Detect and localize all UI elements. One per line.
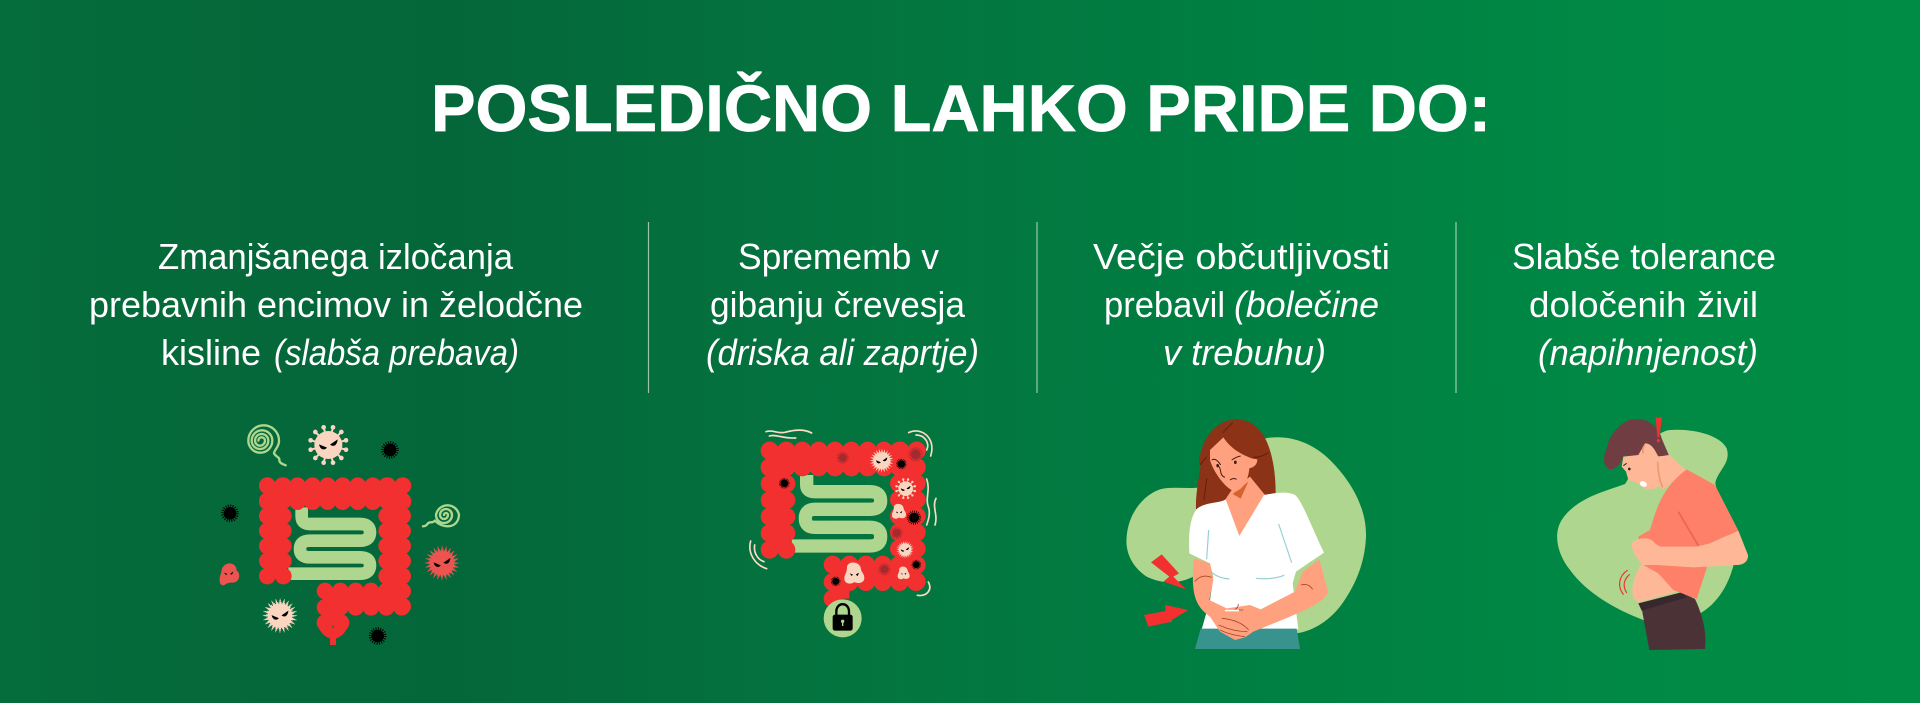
text block: column 2: (driska ali zaprtje) (706, 332, 979, 373)
hair (1604, 419, 1669, 469)
text block: column 1: Zmanjšanega izločanja (158, 236, 514, 277)
red blob germ (220, 563, 239, 585)
arm and hands (1632, 531, 1748, 567)
text block: column 4 (1512, 236, 1776, 373)
text block: column 4: določenih živil (1529, 284, 1758, 325)
head and neck (1622, 443, 1687, 489)
title: POSLEDIČNO LAHKO PRIDE DO: (431, 71, 1491, 145)
text block: column 2: Sprememb v (738, 236, 939, 277)
icon: woman with abdominal pain (1126, 419, 1366, 649)
small intestine (288, 507, 370, 574)
neck and chest (1225, 477, 1265, 536)
motion lines (750, 430, 936, 596)
pain bolts (1144, 554, 1188, 627)
small intestine (792, 475, 881, 546)
shirt (1189, 493, 1324, 629)
text block: column 1: (slabša prebava) (274, 332, 519, 373)
text block: column 4: Slabše tolerance (1512, 236, 1776, 277)
large intestine (770, 451, 917, 599)
pants (1642, 595, 1705, 650)
icon: intestine with constipation lock (750, 430, 936, 637)
icon: intestine with germs (220, 425, 459, 645)
text block: column 3: prebavil (1104, 284, 1225, 325)
green blob (1126, 437, 1366, 633)
red spiky germ (426, 547, 458, 579)
text block: column 1: kisline (161, 332, 261, 373)
lock badge (824, 599, 862, 637)
black germ (382, 442, 398, 458)
shirt (1638, 469, 1738, 599)
text block: column 2: gibanju črevesja (710, 284, 966, 325)
text block: column 3: Večje občutljivosti (1093, 236, 1390, 277)
large intestine (267, 486, 403, 645)
spiral germ (248, 425, 286, 465)
text block: column 3: v trebuhu) (1163, 332, 1326, 373)
text block: column 1 (89, 236, 583, 373)
knobbed germ (311, 427, 346, 463)
green blob (1557, 430, 1734, 620)
arms and hands (1193, 558, 1328, 640)
belly (1632, 563, 1677, 602)
mouth (1639, 480, 1648, 488)
exclamation mark (1656, 417, 1662, 442)
spiral germ right (423, 505, 459, 526)
text block: column 4: (napihnjenost) (1538, 332, 1758, 373)
face (1210, 437, 1257, 492)
germs inside intestine (780, 448, 922, 586)
text block: column 1: prebavnih encimov in želodčne (89, 284, 583, 325)
text block: column 3: (bolečine (1234, 284, 1379, 325)
hair (1196, 419, 1276, 509)
peach spiky germ (264, 599, 296, 632)
text block: column 2 (706, 236, 979, 373)
bloating waves (1620, 570, 1629, 594)
pants (1195, 629, 1300, 649)
text block: column 3 (1093, 236, 1390, 373)
icon: man with bloating (1557, 417, 1748, 650)
